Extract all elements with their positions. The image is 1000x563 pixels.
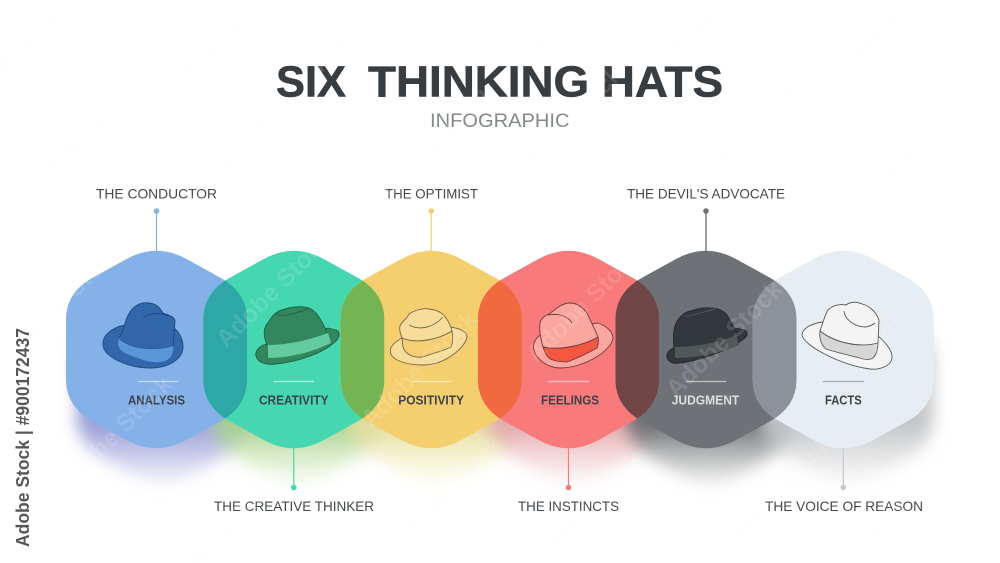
title: THINKING HATS <box>368 58 723 106</box>
icon: yellow hat <box>390 309 467 365</box>
overlap: red and grey <box>616 280 659 418</box>
watermark pattern: Adobe Stock <box>380 430 508 558</box>
panel: analysis <box>66 186 247 448</box>
caption: the creative thinker: THE CREATIVE THINKER <box>214 498 374 514</box>
hexagon: green <box>203 251 384 448</box>
overlap: yellow and red <box>478 280 522 418</box>
divider line <box>274 380 314 382</box>
connector: instincts <box>566 447 571 490</box>
caption: the devil's advocate: THE DEVIL'S ADVOCATE <box>627 186 785 202</box>
overlap: blue and green <box>203 280 247 418</box>
icon: green hat <box>256 307 339 364</box>
watermark pattern: Adobe Stock <box>50 370 178 498</box>
coloured soft shadows below hexagons <box>77 297 933 483</box>
watermark pattern: Adobe Stock <box>860 230 988 358</box>
label: facts: FACTS <box>825 394 862 408</box>
icon: white hat <box>802 302 892 369</box>
caption: the voice of reason: THE VOICE OF REASON <box>765 498 923 514</box>
hexagon: pale <box>753 251 934 448</box>
icon: blue hat <box>103 303 183 368</box>
watermark pattern: Adobe Stock <box>165 92 293 220</box>
title: SIX <box>276 58 346 106</box>
caption: the optimist: THE OPTIMIST <box>385 186 478 202</box>
icon: red hat <box>533 303 613 368</box>
hexagon: dark grey <box>616 251 796 448</box>
connector: voice of reason <box>840 447 846 490</box>
watermark pattern: Adobe Stock <box>660 275 788 403</box>
connector: creative thinker <box>291 447 297 490</box>
label: creativity: CREATIVITY <box>259 394 329 408</box>
hexagon: red <box>478 251 659 448</box>
panel: judgment <box>616 186 796 448</box>
watermark pattern: Adobe Stock <box>0 235 128 363</box>
caption: the conductor: THE CONDUCTOR <box>96 186 217 202</box>
panel: positivity <box>340 189 500 448</box>
watermark pattern: Adobe Stock <box>840 435 968 563</box>
watermark pattern: Adobe Stock <box>375 80 503 208</box>
stock id side text: Adobe Stock | #900172437 <box>13 328 33 547</box>
divider line <box>548 380 589 382</box>
hexagon: blue <box>66 251 247 448</box>
divider line <box>138 380 178 382</box>
overlap: grey and pale <box>753 280 796 418</box>
connector: optimist <box>428 208 434 252</box>
caption: the instincts: THE INSTINCTS <box>518 498 619 514</box>
hexagon: yellow <box>341 251 522 448</box>
watermark pattern: Adobe Stock <box>520 240 648 368</box>
panel: facts <box>753 251 934 514</box>
connector: conductor <box>154 208 159 252</box>
subtitle: INFOGRAPHIC <box>430 110 570 132</box>
watermark pattern: Adobe Stock <box>690 60 818 188</box>
watermark pattern: Adobe Stock <box>355 305 483 433</box>
label: positivity: POSITIVITY <box>398 394 465 408</box>
connector: devil's advocate <box>703 208 709 252</box>
panel: creativity <box>203 251 384 514</box>
watermark pattern: Adobe Stock <box>500 60 628 188</box>
watermark pattern: Adobe Stock <box>830 105 958 233</box>
label: analysis: ANALYSIS <box>128 394 185 408</box>
divider line <box>686 380 726 382</box>
panel: feelings <box>478 250 638 511</box>
divider line <box>823 380 864 382</box>
label: feelings: FEELINGS <box>541 394 599 408</box>
watermark pattern: Adobe Stock <box>710 430 838 558</box>
divider line <box>411 380 452 382</box>
label: judgment: JUDGMENT <box>672 394 740 408</box>
overlap: green and yellow <box>340 280 384 418</box>
icon: black hat <box>667 308 747 363</box>
watermark pattern: Adobe Stock <box>210 225 338 353</box>
watermark pattern: Adobe Stock <box>38 52 166 180</box>
